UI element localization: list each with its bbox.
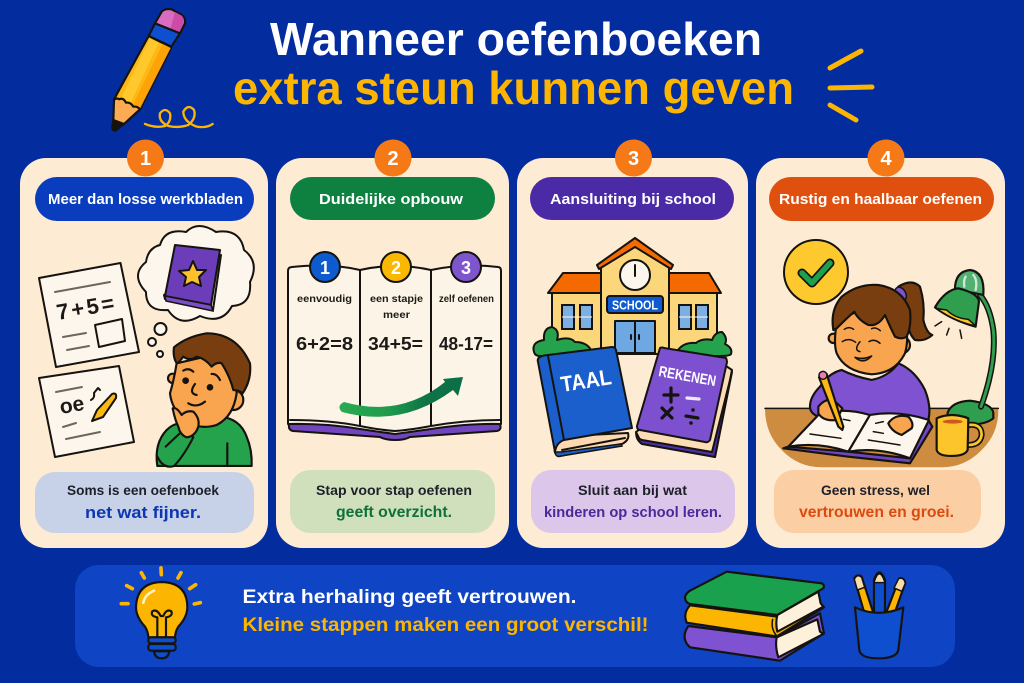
icon: check mark: [784, 240, 848, 304]
heading pill 1: [35, 177, 254, 221]
open book with three steps: [288, 252, 501, 440]
school sign: SCHOOL: [612, 298, 658, 312]
book: TAAL: TAAL: [559, 364, 613, 397]
message box 2: Stap voor stap oefenen: [316, 482, 472, 498]
step circle 1: [310, 252, 340, 282]
panel: card 2: [276, 140, 509, 548]
book: REKENEN: [636, 348, 732, 457]
step 1 text: 6+2=8: [296, 334, 353, 354]
step 3 text: [439, 294, 494, 354]
school building: [533, 238, 731, 356]
message box 3: [531, 470, 735, 533]
worksheet: oe with pencil: [39, 366, 134, 457]
banner text: Kleine stappen maken een groot verschil!: [242, 615, 648, 636]
icon: stack of books: [685, 572, 824, 661]
boy thinking: [157, 333, 252, 467]
mug: [937, 415, 982, 456]
message box 1: net wat fijner.: [85, 503, 201, 522]
step 1 text: eenvoudig: [297, 293, 352, 305]
step 2 text: 34+5=: [368, 334, 423, 354]
panel: card 3: [517, 140, 748, 548]
thought cloud with book: [138, 226, 254, 357]
step circle 3: [451, 252, 481, 282]
step badge 3: 3: [628, 148, 639, 170]
message box 1: Soms is een oefenboek: [67, 482, 219, 498]
step circle 3: 3: [461, 258, 471, 278]
message box 4: Geen stress, wel: [821, 482, 930, 498]
step 1 text: [296, 293, 353, 354]
panel: bottom banner: [75, 565, 955, 667]
step 2 text: een stapje: [370, 293, 423, 305]
heading pill 4: [769, 177, 994, 221]
message box 1: [35, 472, 254, 533]
heading pill 3: Aansluiting bij school: [550, 191, 716, 208]
message box 4: vertrouwen en groei.: [799, 504, 954, 521]
message box 4: [774, 470, 981, 533]
step circle 2: 2: [391, 258, 401, 278]
heading pill 2: [290, 177, 495, 220]
desk: [765, 408, 998, 467]
arrow: progress: [339, 377, 463, 417]
message box 3: Sluit aan bij wat: [578, 482, 687, 498]
heading pill 2: Duidelijke opbouw: [319, 191, 463, 208]
step badge 2: 2: [387, 148, 399, 170]
banner text: Extra herhaling geeft vertrouwen.: [242, 587, 576, 608]
worksheet: 7+5: 7+5=: [55, 290, 116, 325]
step badge 4: 4: [880, 148, 892, 170]
title: [233, 13, 794, 114]
sparkle accent lines: [830, 51, 872, 120]
lamp: [935, 270, 994, 424]
message box 2: geeft overzicht.: [336, 504, 452, 521]
girl writing: [783, 282, 932, 463]
step badge 4: [868, 140, 904, 176]
worksheet: 7+5: [39, 263, 139, 367]
step badge 2: [374, 140, 412, 176]
step badge 3: [615, 140, 652, 176]
heading pill 4: Rustig en haalbaar oefenen: [779, 191, 982, 208]
step badge 1: [127, 140, 164, 176]
heading pill 1: Meer dan losse werkbladen: [48, 191, 243, 208]
step 2 text: [368, 293, 423, 354]
step circle 2: [381, 252, 411, 282]
step 3 text: 48-17=: [439, 334, 493, 354]
step 2 text: meer: [383, 309, 410, 321]
book: REKENEN: REKENEN: [657, 363, 717, 390]
step circle 1: 1: [320, 258, 330, 278]
worksheet: oe with pencil: oe: [58, 392, 86, 419]
step 3 text: zelf oefenen: [439, 294, 494, 305]
title: Wanneer oefenboeken: [270, 13, 762, 65]
panel: card 4: [756, 140, 1005, 548]
banner text: [242, 587, 648, 636]
heading pill 3: [530, 177, 734, 220]
book: TAAL: [538, 347, 632, 456]
icon: pencil cup: [854, 572, 905, 658]
icon: header pencil: [112, 9, 213, 131]
step badge 1: 1: [140, 148, 151, 170]
title: extra steun kunnen geven: [233, 62, 794, 114]
panel: card 1: [20, 140, 268, 548]
message box 3: kinderen op school leren.: [544, 504, 722, 521]
icon: light bulb: [121, 568, 200, 658]
message box 2: [290, 470, 495, 533]
